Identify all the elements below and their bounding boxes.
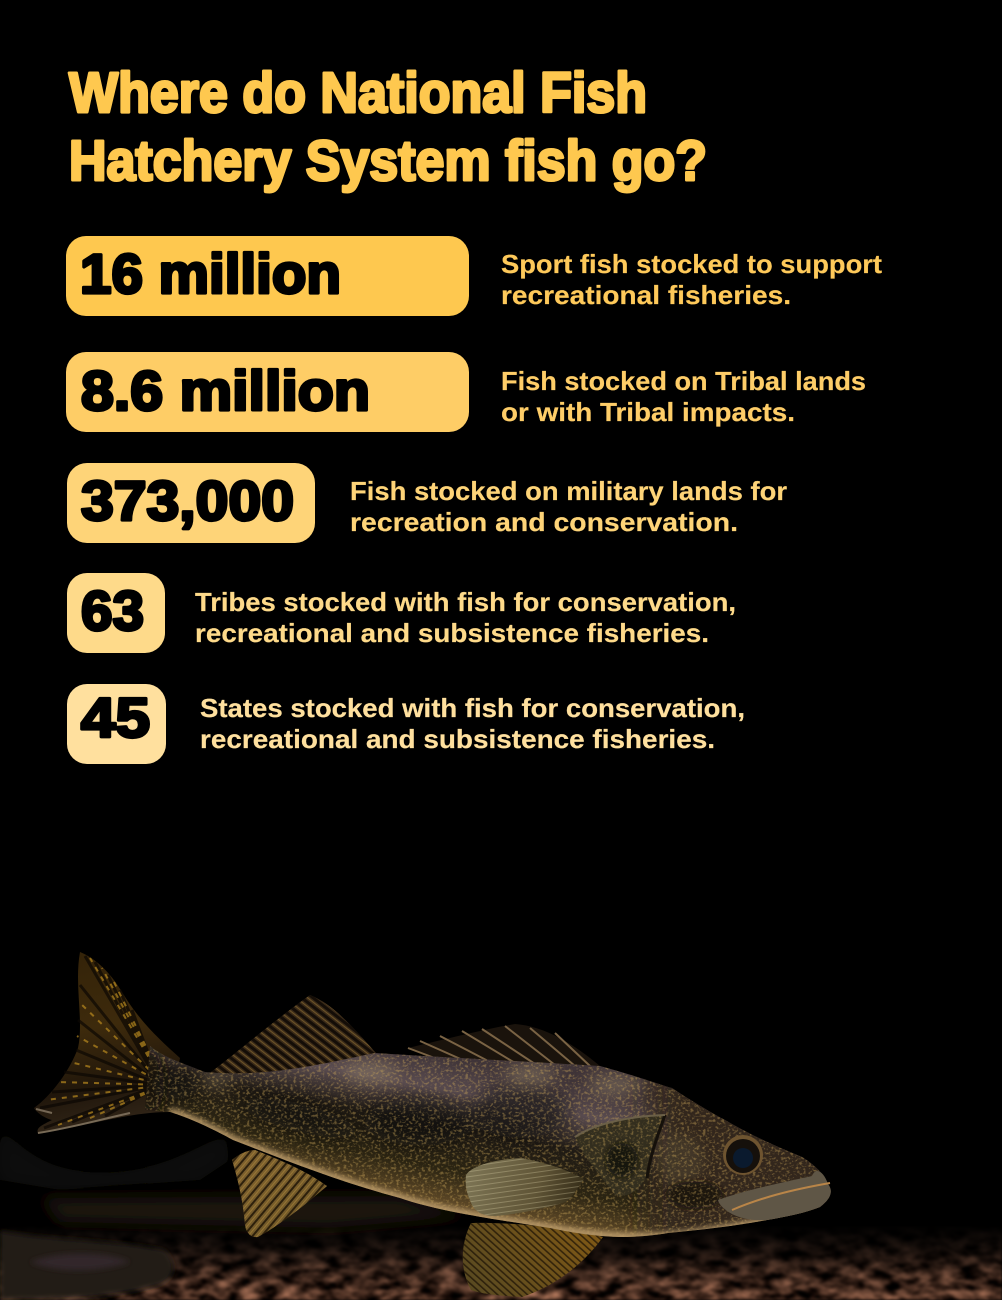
fin: pectoral (466, 1158, 584, 1216)
title: Where do National Fish (69, 61, 647, 125)
description: tribal lands (501, 366, 866, 427)
description: sport fish (501, 249, 882, 310)
head details (575, 1115, 831, 1220)
stat row: 16 million (66, 236, 882, 316)
description: tribal lands: or with Tribal impacts. (501, 397, 795, 427)
description: tribes: Tribes stocked with fish for conservation, (195, 587, 736, 617)
title (69, 61, 707, 193)
head tone (634, 1080, 831, 1233)
scale speckle (145, 1046, 831, 1237)
description: military lands: Fish stocked on military lands for (350, 476, 787, 506)
pill: 8.6 million (66, 352, 469, 432)
rock (0, 1231, 173, 1300)
description: tribes (195, 587, 736, 648)
gill cover (575, 1115, 665, 1196)
title: Hatchery System fish go? (69, 129, 707, 193)
description: tribes: recreational and subsistence fisheries. (195, 618, 709, 648)
description: military lands: recreation and conservation. (350, 507, 738, 537)
fish body (145, 1046, 831, 1237)
description: states (200, 693, 745, 754)
description: states: States stocked with fish for conservation, (200, 693, 745, 723)
dark cheek (667, 1181, 723, 1209)
pill: 63 (67, 573, 165, 653)
pill: 373,000 (67, 463, 315, 543)
pill: 45 (67, 684, 166, 764)
pale highlights (199, 1063, 643, 1094)
fish: walleye (34, 952, 880, 1297)
jaw (718, 1171, 831, 1220)
stat row: 8.6 million (66, 352, 866, 432)
description: sport fish: Sport fish stocked to support (501, 249, 882, 279)
description: states: recreational and subsistence fisheries. (200, 724, 715, 754)
stat row: 45 states (67, 684, 745, 764)
fin: pelvic (463, 1223, 603, 1297)
riverbed scene (0, 1125, 1002, 1300)
gravel floor (0, 1225, 1002, 1300)
description: sport fish: recreational fisheries. (501, 280, 791, 310)
description: military lands (350, 476, 787, 537)
fin: anal (232, 1150, 327, 1237)
tail base shadow (145, 1046, 166, 1110)
stat row: 373,000 (67, 463, 787, 543)
pill: 16 million (66, 236, 469, 316)
eye (723, 1135, 763, 1175)
fin: soft dorsal (206, 995, 376, 1078)
description: tribal lands: Fish stocked on Tribal lands (501, 366, 866, 396)
belly highlight (170, 1112, 820, 1237)
pill: 63: 63 (81, 579, 144, 642)
fin: spiny dorsal (408, 1024, 600, 1066)
pill: 16 million: 16 million (80, 242, 341, 305)
pill: 373,000: 373,000 (81, 469, 294, 532)
fin: tail (34, 952, 180, 1134)
pill: 45: 45 (81, 686, 150, 749)
stat row: 63 tribes (67, 573, 736, 653)
pill: 8.6 million: 8.6 million (81, 359, 370, 422)
blurred background fish shape (0, 1125, 470, 1228)
dark side bars (150, 1071, 570, 1146)
